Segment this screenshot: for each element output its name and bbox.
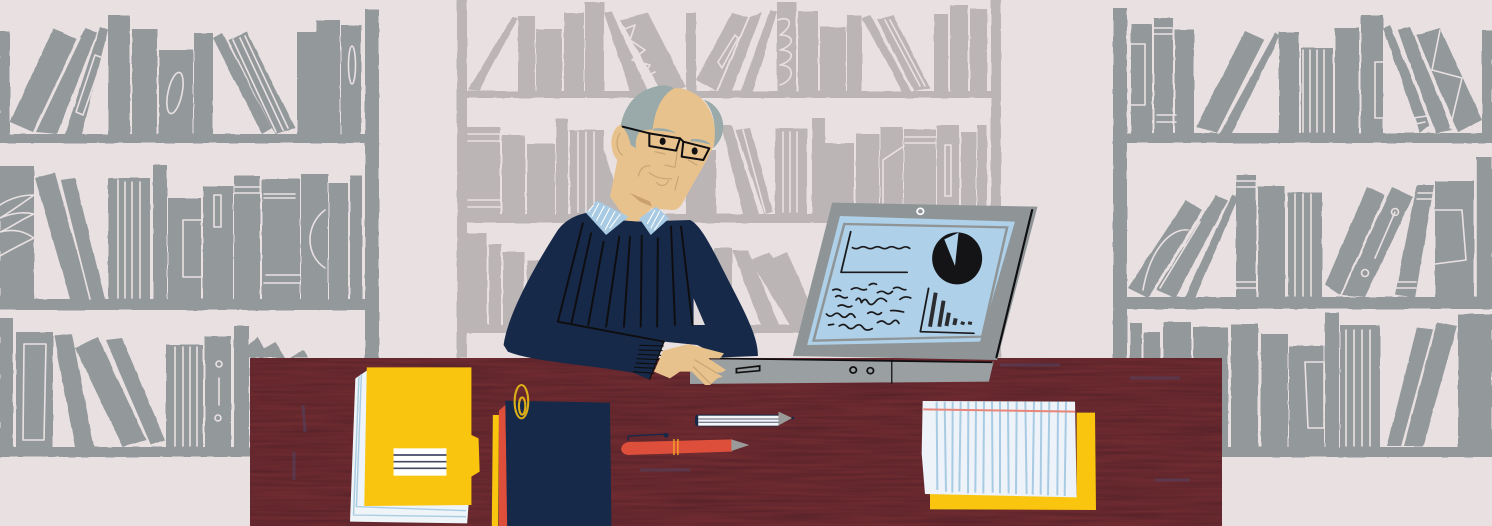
sweater: [504, 213, 758, 379]
yellow folder: [364, 367, 480, 506]
gap between arm and body: [694, 298, 705, 325]
grey pen: [695, 412, 794, 426]
screen: bar chart: [920, 288, 974, 333]
sweater ribs: [558, 223, 692, 342]
yellow-backed notepad: [922, 401, 1096, 510]
shirt collar: [586, 201, 669, 235]
face and neck: [610, 88, 715, 223]
laptop base: [690, 358, 994, 384]
left shelf book details: [0, 36, 356, 446]
desk: [250, 358, 1222, 526]
panel: left bookshelf: [0, 9, 379, 457]
illustration: body and laptop: [504, 201, 1037, 384]
desk items: [350, 367, 794, 526]
facial features: [617, 133, 698, 207]
screen: text lines: [826, 283, 911, 330]
hand: [654, 344, 726, 385]
laptop screen: [793, 203, 1037, 360]
illustration: head of the man: [610, 85, 723, 223]
sweater cuff: [634, 342, 664, 379]
folder label: [394, 448, 446, 476]
screen: pie chart: [932, 232, 982, 284]
glasses: [623, 127, 709, 160]
panel: centre bookshelf: [457, 0, 1001, 358]
right shelf book details: [1131, 28, 1476, 446]
screen: line chart: [841, 232, 910, 272]
paperclip: [515, 385, 528, 418]
paper stack: [350, 371, 469, 523]
panel: right bookshelf: [1113, 8, 1492, 457]
centre shelf book details: [468, 19, 951, 212]
red pen: [621, 433, 749, 455]
hair: [621, 85, 723, 148]
notebook: [492, 401, 611, 526]
